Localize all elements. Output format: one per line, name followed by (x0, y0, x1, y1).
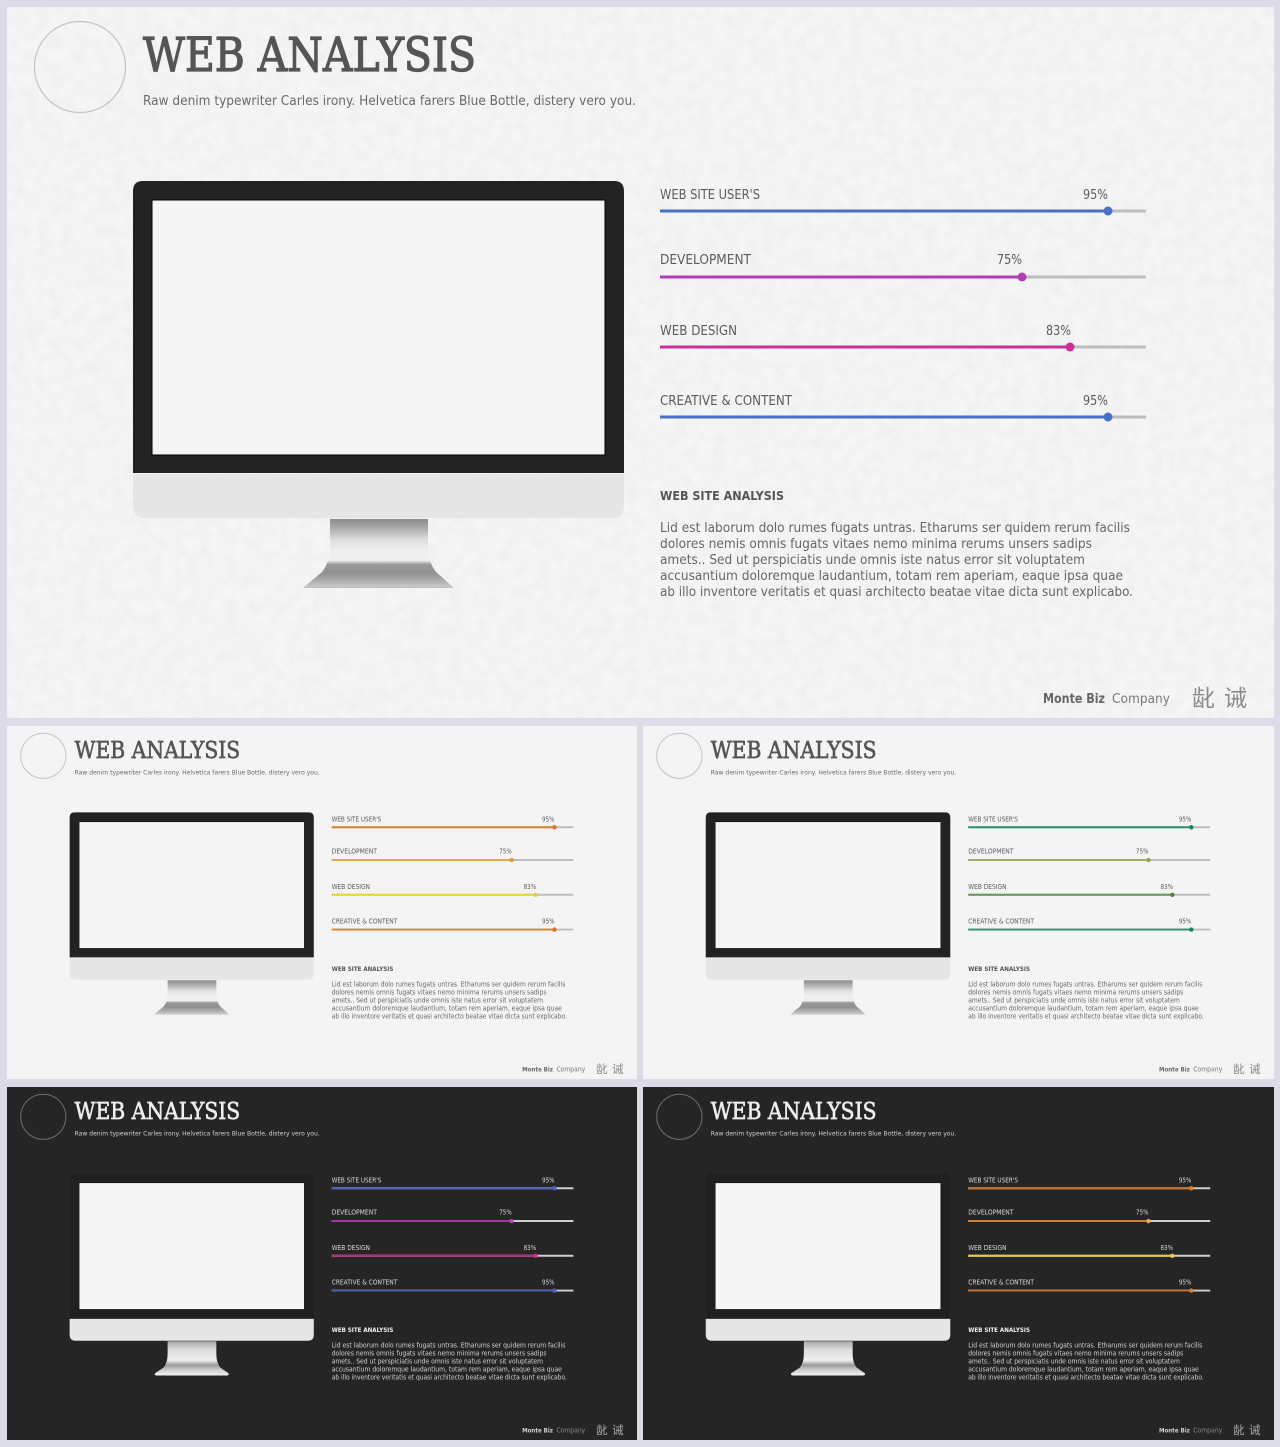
analysis body text: amets.. Sed ut perspiciatis unde omnis iste natus error sit voluptatem (332, 997, 543, 1005)
progress bar: development 75% (660, 252, 1146, 282)
subtitle: Raw denim typewriter Carles irony. Helvetica farers Blue Bottle, distery vero you. (75, 1130, 320, 1138)
footer brand: Monte Biz (1159, 1066, 1190, 1074)
monitor illustration (706, 812, 950, 1014)
subtitle: Raw denim typewriter Carles irony. Helvetica farers Blue Bottle, distery vero you. (143, 94, 636, 109)
progress bar: development 75%: DEVELOPMENT (332, 1209, 378, 1217)
progress bar: web site users 95% (968, 1176, 1210, 1191)
progress bar: web design 83% (332, 1244, 573, 1258)
analysis body text: Lid est laborum dolo rumes fugats untras. Etharums ser quidem rerum facilis (332, 981, 566, 989)
analysis body text: ab illo inventore veritatis et quasi architecto beatae vitae dicta sunt explicabo. (968, 1012, 1204, 1020)
analysis body text: amets.. Sed ut perspiciatis unde omnis iste natus error sit voluptatem (968, 997, 1180, 1005)
footer brand: Company (556, 1066, 585, 1074)
progress bar: web design 83%: 83% (524, 883, 536, 891)
progress bar: development 75%: DEVELOPMENT (332, 848, 378, 856)
progress bar: creative and content 95%: 95% (1083, 393, 1108, 409)
progress bar: web site users 95% (332, 1176, 573, 1191)
title: WEB ANALYSIS (75, 736, 240, 764)
progress bar: web design 83%: WEB DESIGN (660, 323, 737, 339)
title: WEB ANALYSIS (143, 28, 476, 83)
progress bar: web design 83% (332, 883, 573, 897)
monitor illustration (70, 1173, 314, 1375)
footer brand: Monte Biz (1043, 692, 1105, 707)
panel: light green variant (643, 726, 1274, 1079)
monitor illustration (133, 181, 624, 588)
subtitle: Raw denim typewriter Carles irony. Helvetica farers Blue Bottle, distery vero you. (711, 769, 956, 777)
progress bar: creative and content 95% (332, 1279, 573, 1293)
progress bar: web design 83% (968, 883, 1210, 897)
footer brand: 诫 (1249, 1061, 1261, 1077)
analysis body text: ab illo inventore veritatis et quasi architecto beatae vitae dicta sunt explicabo. (332, 1012, 567, 1020)
progress bar: creative and content 95% (332, 918, 573, 932)
panel: dark orange variant (643, 1087, 1274, 1440)
progress bar: web design 83% (660, 323, 1146, 352)
progress bar: web site users 95%: WEB SITE USER'S (968, 815, 1018, 823)
analysis body text: amets.. Sed ut perspiciatis unde omnis iste natus error sit voluptatem (660, 552, 1085, 568)
footer brand (1159, 1422, 1261, 1438)
analysis heading: WEB SITE ANALYSIS (332, 1327, 393, 1334)
analysis body text: ab illo inventore veritatis et quasi architecto beatae vitae dicta sunt explicabo. (332, 1373, 567, 1381)
progress bar: development 75%: 75% (499, 1209, 512, 1217)
subtitle: Raw denim typewriter Carles irony. Helvetica farers Blue Bottle, distery vero you. (75, 769, 320, 777)
progress bar: development 75%: 75% (997, 252, 1022, 268)
image placeholder circle (34, 22, 126, 112)
progress bar: web site users 95%: WEB SITE USER'S (332, 815, 381, 823)
monitor illustration (706, 1173, 950, 1375)
analysis body text: accusantium doloremque laudantium, totam rem aperiam, eaque ipsa quae (968, 1365, 1199, 1373)
progress bar: web design 83% (968, 1244, 1210, 1258)
title: WEB ANALYSIS (711, 736, 877, 764)
analysis body text: dolores nemis omnis fugats vitaes nemo minima rerums unsers sadips (332, 1350, 547, 1358)
footer brand: 诫 (1249, 1422, 1261, 1438)
image placeholder circle (657, 733, 702, 778)
progress bar: creative and content 95% (660, 393, 1146, 422)
title: WEB ANALYSIS (711, 1097, 877, 1125)
progress bar: web design 83%: WEB DESIGN (332, 1244, 370, 1252)
image placeholder circle (657, 1094, 702, 1139)
progress bar: development 75% (968, 848, 1210, 862)
footer brand: 诫 (612, 1061, 624, 1077)
progress bar: creative and content 95%: 95% (1179, 918, 1191, 926)
footer brand: 诫 (612, 1422, 624, 1438)
progress bar: web site users 95%: WEB SITE USER'S (332, 1176, 381, 1184)
footer brand: 龀 (1233, 1061, 1245, 1077)
subtitle: Raw denim typewriter Carles irony. Helvetica farers Blue Bottle, distery vero you. (711, 1130, 956, 1138)
footer brand (522, 1422, 624, 1438)
progress bar: development 75%: 75% (1136, 848, 1148, 856)
image placeholder circle (21, 733, 66, 778)
footer brand: Company (556, 1427, 585, 1435)
image placeholder circle (21, 1094, 66, 1139)
analysis body text: dolores nemis omnis fugats vitaes nemo minima rerums unsers sadips (968, 989, 1184, 997)
panel: dark blue and magenta variant (7, 1087, 637, 1440)
progress bar: creative and content 95%: 95% (1179, 1279, 1191, 1287)
analysis heading: WEB SITE ANALYSIS (968, 1327, 1030, 1334)
progress bar: web site users 95%: 95% (1179, 1176, 1191, 1184)
progress bar: web design 83%: 83% (524, 1244, 536, 1252)
analysis body text (968, 1342, 1204, 1381)
progress bar: web site users 95%: WEB SITE USER'S (968, 1176, 1018, 1184)
progress bar: web design 83%: WEB DESIGN (332, 883, 370, 891)
progress bar: web site users 95%: 95% (542, 1176, 554, 1184)
footer brand: 龀 (596, 1422, 608, 1438)
progress bar: creative and content 95%: CREATIVE & CONTENT (968, 918, 1035, 926)
footer brand: Monte Biz (522, 1066, 553, 1074)
analysis body text: dolores nemis omnis fugats vitaes nemo minima rerums unsers sadips (332, 989, 547, 997)
progress bar: development 75%: DEVELOPMENT (968, 1209, 1014, 1217)
progress bar: web site users 95% (332, 815, 573, 830)
footer brand: Monte Biz (1159, 1427, 1190, 1435)
footer brand: Company (1112, 691, 1170, 707)
footer brand (522, 1061, 624, 1077)
analysis body text (968, 981, 1204, 1020)
panel: main light blue and magenta slide (7, 7, 1274, 718)
progress bar: web site users 95% (660, 187, 1146, 216)
progress bar: creative and content 95%: CREATIVE & CONTENT (968, 1279, 1035, 1287)
analysis body text (660, 520, 1133, 600)
footer brand: 龀 (1233, 1422, 1245, 1438)
progress bar: web design 83%: WEB DESIGN (968, 1244, 1007, 1252)
progress bar: development 75% (968, 1209, 1210, 1223)
analysis body text: Lid est laborum dolo rumes fugats untras. Etharums ser quidem rerum facilis (968, 981, 1203, 989)
analysis body text: accusantium doloremque laudantium, totam rem aperiam, eaque ipsa quae (332, 1004, 562, 1012)
progress bar: development 75%: 75% (1136, 1209, 1148, 1217)
progress bar: web design 83%: 83% (1160, 1244, 1173, 1252)
progress bar: creative and content 95%: 95% (542, 918, 554, 926)
analysis body text (332, 1342, 567, 1381)
progress bar: development 75% (332, 848, 573, 862)
footer brand: Monte Biz (522, 1427, 553, 1435)
analysis body text: accusantium doloremque laudantium, totam rem aperiam, eaque ipsa quae (660, 568, 1123, 584)
footer brand: Company (1193, 1066, 1222, 1074)
footer brand: 诫 (1224, 679, 1247, 713)
progress bar: web site users 95%: WEB SITE USER'S (660, 187, 760, 203)
progress bar: development 75% (332, 1209, 573, 1223)
footer brand: 龀 (1192, 679, 1215, 713)
progress bar: development 75%: DEVELOPMENT (968, 848, 1014, 856)
analysis body text (332, 981, 567, 1020)
footer brand: Company (1193, 1427, 1222, 1435)
progress bar: development 75%: 75% (499, 848, 512, 856)
analysis heading: WEB SITE ANALYSIS (332, 966, 393, 973)
monitor illustration (70, 812, 314, 1014)
progress bar: web site users 95%: 95% (542, 815, 554, 823)
analysis body text: Lid est laborum dolo rumes fugats untras. Etharums ser quidem rerum facilis (332, 1342, 566, 1350)
analysis body text: accusantium doloremque laudantium, totam rem aperiam, eaque ipsa quae (332, 1365, 562, 1373)
progress bar: web site users 95%: 95% (1179, 815, 1191, 823)
analysis body text: amets.. Sed ut perspiciatis unde omnis iste natus error sit voluptatem (332, 1358, 543, 1366)
progress bar: web site users 95%: 95% (1083, 187, 1108, 203)
analysis body text: Lid est laborum dolo rumes fugats untras. Etharums ser quidem rerum facilis (968, 1342, 1203, 1350)
progress bar: creative and content 95%: CREATIVE & CONTENT (332, 918, 398, 926)
progress bar: web site users 95% (968, 815, 1210, 830)
analysis body text: ab illo inventore veritatis et quasi architecto beatae vitae dicta sunt explicabo. (660, 584, 1133, 600)
analysis body text: ab illo inventore veritatis et quasi architecto beatae vitae dicta sunt explicabo. (968, 1373, 1204, 1381)
progress bar: development 75%: DEVELOPMENT (660, 252, 752, 268)
analysis body text: amets.. Sed ut perspiciatis unde omnis iste natus error sit voluptatem (968, 1358, 1180, 1366)
analysis body text: Lid est laborum dolo rumes fugats untras. Etharums ser quidem rerum facilis (660, 520, 1130, 536)
analysis body text: accusantium doloremque laudantium, totam rem aperiam, eaque ipsa quae (968, 1004, 1199, 1012)
progress bar: creative and content 95%: CREATIVE & CONTENT (660, 393, 793, 409)
footer brand: 龀 (596, 1061, 608, 1077)
analysis heading: WEB SITE ANALYSIS (660, 489, 784, 503)
analysis heading: WEB SITE ANALYSIS (968, 966, 1030, 973)
progress bar: creative and content 95%: CREATIVE & CONTENT (332, 1279, 398, 1287)
panel: light orange variant (7, 726, 637, 1079)
footer brand (1043, 679, 1247, 713)
progress bar: creative and content 95% (968, 1279, 1210, 1293)
title: WEB ANALYSIS (75, 1097, 240, 1125)
progress bar: web design 83%: 83% (1160, 883, 1173, 891)
analysis body text: dolores nemis omnis fugats vitaes nemo minima rerums unsers sadips (660, 536, 1092, 552)
progress bar: web design 83%: WEB DESIGN (968, 883, 1007, 891)
footer brand (1159, 1061, 1261, 1077)
progress bar: creative and content 95%: 95% (542, 1279, 554, 1287)
progress bar: creative and content 95% (968, 918, 1210, 932)
analysis body text: dolores nemis omnis fugats vitaes nemo minima rerums unsers sadips (968, 1350, 1184, 1358)
progress bar: web design 83%: 83% (1046, 323, 1071, 339)
